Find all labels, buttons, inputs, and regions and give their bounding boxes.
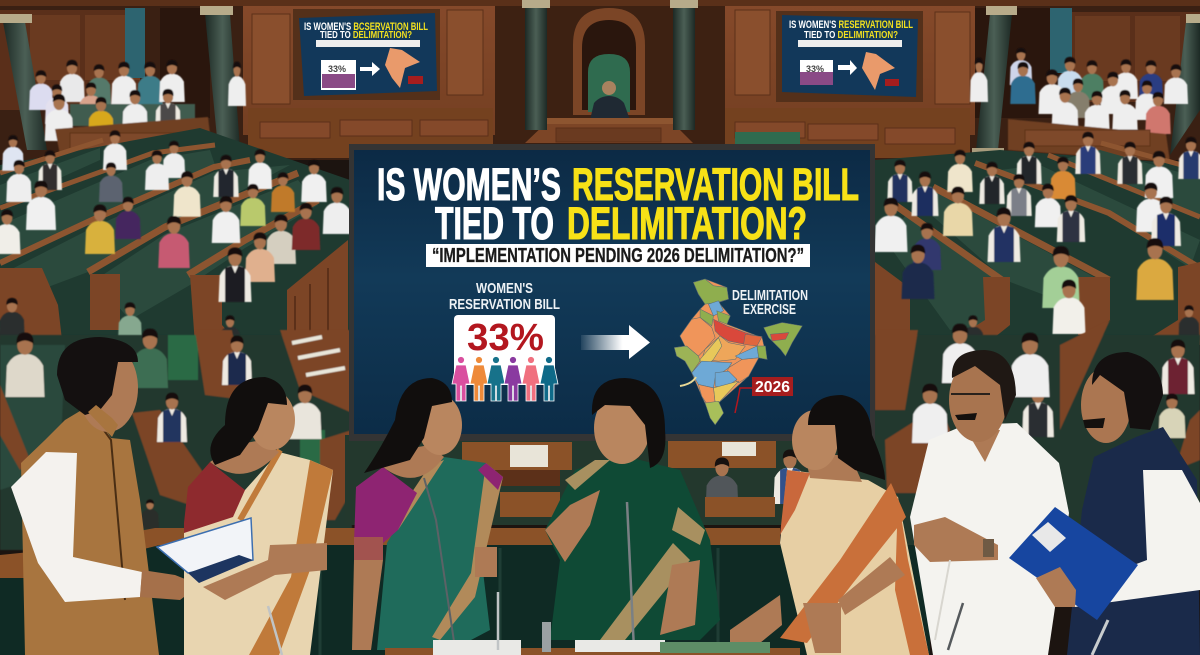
headline line two: DELIMITATION? <box>567 198 807 249</box>
main screen panel <box>349 144 875 441</box>
headline line one <box>377 159 859 210</box>
front desk with papers and microphones <box>268 592 800 655</box>
lower left chamber <box>0 329 352 550</box>
presenter man in tan vest <box>11 337 200 655</box>
label: delimitation exercise: DELIMITATION <box>732 287 808 304</box>
visitor gallery right <box>970 48 1188 162</box>
small wall screen left <box>293 9 440 100</box>
headline line one: RESERVATION BILL <box>572 159 859 210</box>
members seated on the left benches <box>0 130 351 350</box>
man in navy vest <box>1067 352 1200 655</box>
subtitle bar: “IMPLEMENTATION PENDING 2026 DELIMITATION?” <box>432 245 804 267</box>
small wall screen right: IS WOMEN'S RESERVATION BILL <box>789 19 913 31</box>
small wall screen right: 33% <box>806 64 824 74</box>
label: women's reservation bill: RESERVATION BILL <box>449 296 560 313</box>
woman in red blouse and cream saree <box>184 377 333 655</box>
2026 badge <box>735 377 793 413</box>
label: women's reservation bill: WOMEN'S <box>476 280 533 297</box>
right benches <box>875 143 1200 345</box>
small wall screen left: IS WOMEN'S BCSERVATION BILL <box>304 21 428 33</box>
map of India <box>674 279 802 425</box>
woman in cream saree with orange border <box>730 395 929 655</box>
arrow <box>581 325 650 359</box>
2026 badge: 2026 <box>755 379 790 396</box>
label: women's reservation bill <box>449 280 560 313</box>
headline line one: IS WOMEN’S <box>377 159 561 210</box>
visitor gallery left <box>29 60 246 160</box>
small wall screen left: TIED TO DELIMITATION? <box>320 30 412 41</box>
headline line two <box>435 198 807 249</box>
small wall screen right <box>776 11 923 102</box>
lower right chamber <box>870 320 1200 550</box>
33 percent card: 33% <box>467 317 544 359</box>
label: delimitation exercise: EXERCISE <box>743 301 796 318</box>
left benches <box>0 128 350 345</box>
icon: row of six women <box>452 356 558 401</box>
folder held by last man <box>1009 507 1138 620</box>
man in white kurta <box>910 350 1069 655</box>
pillars <box>0 0 1200 160</box>
central woman speaking in dark green saree <box>545 378 720 650</box>
small wall screen left: 33% <box>328 64 346 74</box>
folder held by first man <box>157 518 253 583</box>
members seated on the right benches <box>874 132 1200 350</box>
33 percent card <box>454 315 555 385</box>
lower centre desks and benches <box>0 435 930 655</box>
speaker's chair and desk <box>525 8 800 144</box>
headline line two: TIED TO <box>435 198 554 249</box>
woman in magenta blouse and green saree <box>352 378 503 655</box>
back wall of the chamber <box>0 0 1200 160</box>
label: delimitation exercise <box>732 287 808 318</box>
small wall screen right: TIED TO DELIMITATION? <box>804 30 898 41</box>
